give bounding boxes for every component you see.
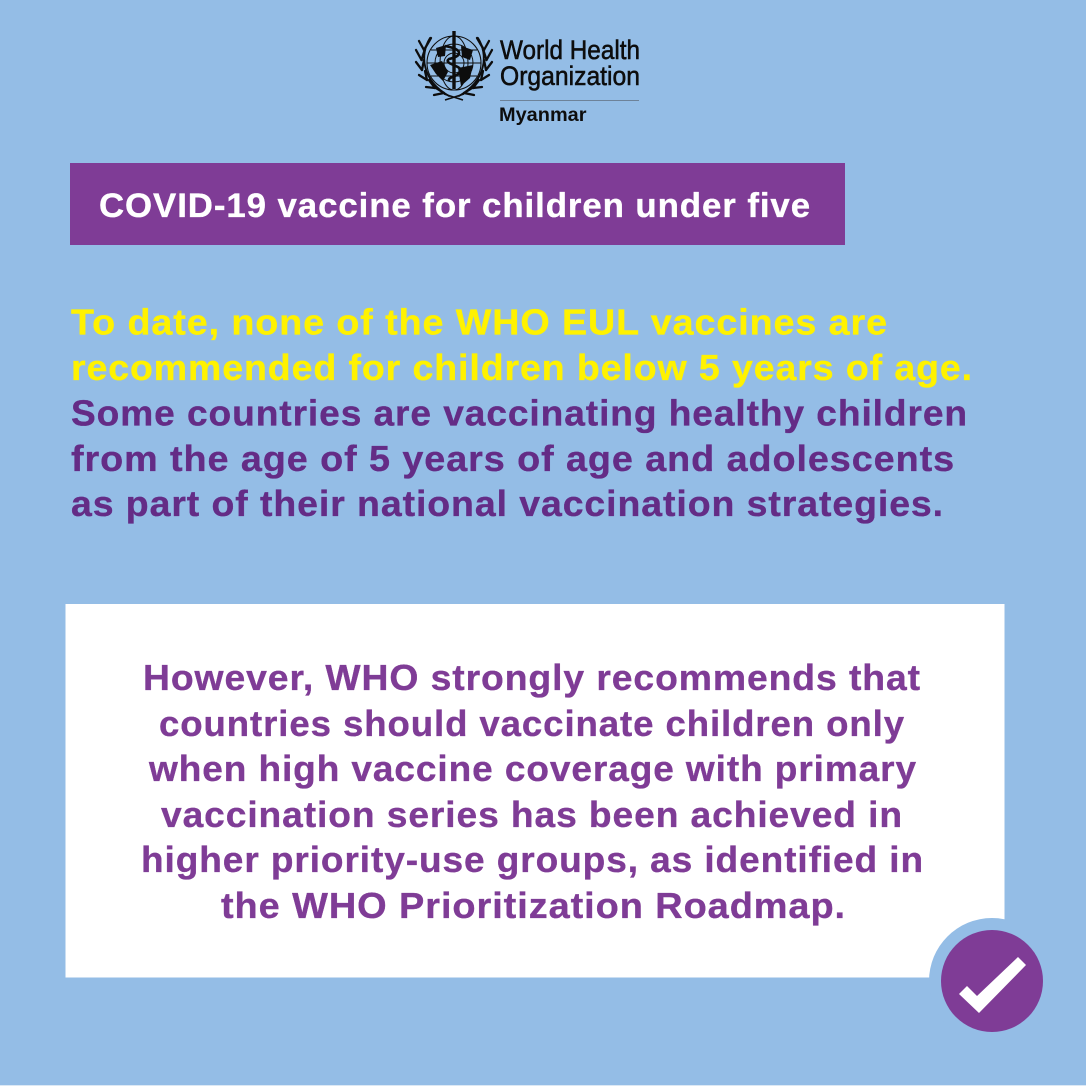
highlighted statement (71, 302, 973, 388)
icon: check mark badge (929, 905, 1086, 1044)
title: COVID-19 vaccine for children under five (99, 187, 811, 225)
supporting statement: as part of their national vaccination strategies. (71, 483, 944, 524)
panel: WHO recommendation (66, 604, 1004, 978)
supporting statement (71, 392, 968, 524)
title banner (70, 163, 845, 245)
logo: World Health Organization Myanmar (416, 31, 640, 126)
recommendation text: higher priority-use groups, as identified in (141, 839, 924, 880)
highlighted statement: recommended for children below 5 years of age. (71, 347, 973, 388)
logo wordmark line 2: Organization (500, 61, 640, 91)
logo country name: Myanmar (499, 105, 587, 126)
icon: WHO emblem (416, 31, 492, 100)
recommendation text (141, 657, 924, 926)
supporting statement: from the age of 5 years of age and adolescents (71, 438, 955, 479)
recommendation text: However, WHO strongly recommends that (143, 657, 921, 698)
intro text block (71, 302, 973, 524)
logo wordmark line 1: World Health (500, 35, 640, 65)
recommendation text: the WHO Prioritization Roadmap. (221, 885, 846, 926)
recommendation text: vaccination series has been achieved in (161, 794, 903, 835)
highlighted statement: To date, none of the WHO EUL vaccines are (71, 302, 888, 342)
recommendation text: when high vaccine coverage with primary (148, 748, 917, 789)
recommendation text: countries should vaccinate children only (159, 703, 905, 744)
supporting statement: Some countries are vaccinating healthy children (71, 392, 968, 434)
